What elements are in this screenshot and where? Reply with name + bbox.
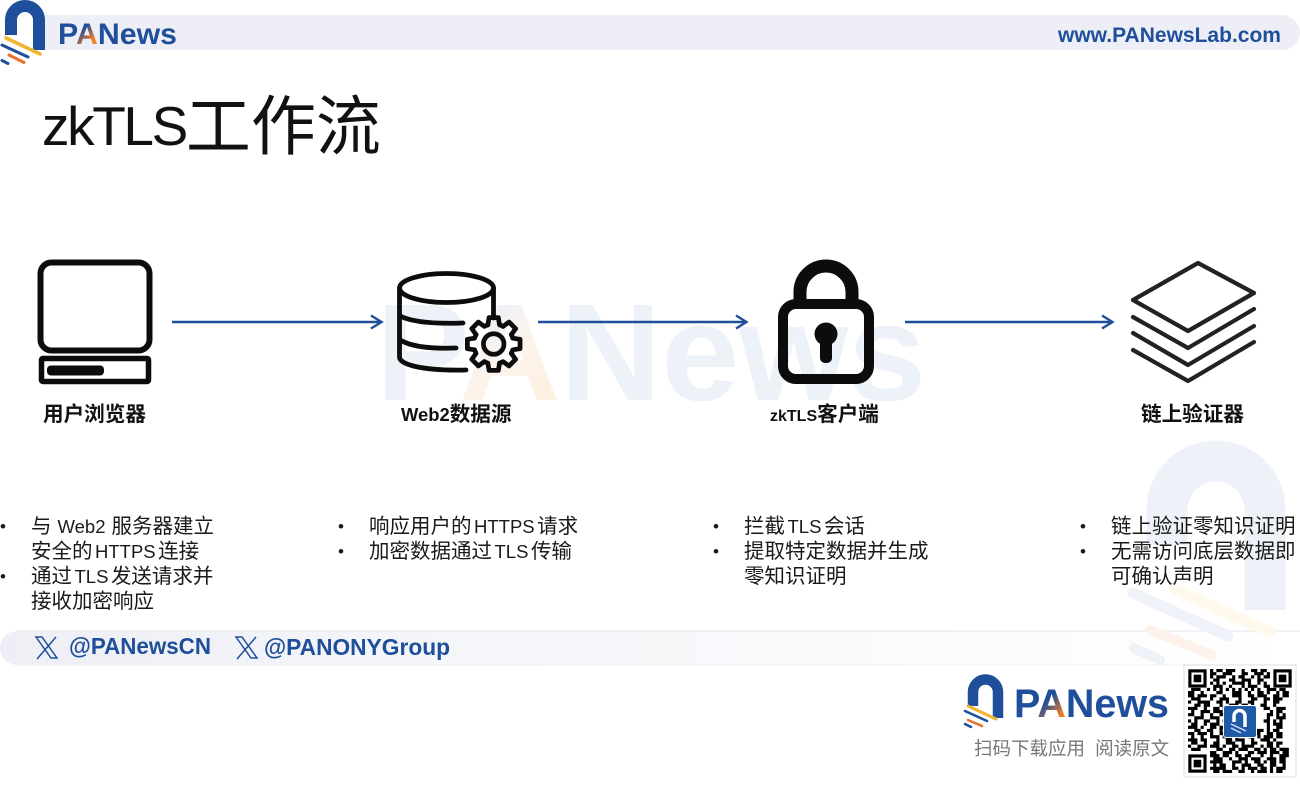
QR code xyxy=(1184,665,1296,777)
handle: PANewsCN: @PANewsCN xyxy=(69,633,211,659)
text block: source steps: 响应用户的HTTPS请求 xyxy=(369,515,578,538)
text block: browser steps xyxy=(0,515,214,613)
handle: PANONYGroup: @PANONYGroup xyxy=(264,634,450,660)
text block: verifier steps: 链上验证零知识证明 xyxy=(1111,515,1296,538)
icon: padlock xyxy=(783,266,869,379)
logo: footer emblem xyxy=(965,680,998,727)
title: zkTLS工作流 xyxy=(42,90,381,163)
icon: layers xyxy=(1133,263,1254,381)
arrow: data source to client xyxy=(538,316,746,328)
caption: scan to download: 扫码下载应用 阅读原文 xyxy=(974,738,1169,759)
footer bar xyxy=(0,631,1300,665)
watermark: corner logo xyxy=(1133,461,1270,660)
arrow: client to verifier xyxy=(905,316,1112,328)
icon: X right xyxy=(236,637,257,659)
label: zkTLS client: zkTLS客户端 xyxy=(770,403,879,426)
label: web2 source: Web2数据源 xyxy=(401,403,512,426)
text block: browser steps: 接收加密响应 xyxy=(31,590,154,613)
text block: browser steps: 通过TLS发送请求并 xyxy=(31,565,213,588)
text block: client steps: 拦截TLS会话 xyxy=(744,515,865,538)
logo: footer wordmark: PANews xyxy=(1014,682,1169,726)
header url: www.PANewsLab.com xyxy=(1057,24,1281,47)
text block: source steps xyxy=(338,515,578,563)
logo: header wordmark: PANews xyxy=(58,18,177,51)
text block: client steps xyxy=(714,515,928,588)
text block: browser steps: 与 Web2 服务器建立 xyxy=(31,515,214,538)
header bar xyxy=(40,15,1300,50)
icon: browser monitor xyxy=(40,262,150,382)
icon: database with gear xyxy=(400,274,520,370)
text block: source steps: 加密数据通过TLS传输 xyxy=(369,540,572,563)
text block: browser steps: 安全的HTTPS连接 xyxy=(31,540,199,563)
logo: header emblem xyxy=(2,6,40,64)
text block: client steps: 提取特定数据并生成 xyxy=(744,540,928,563)
icon: X left xyxy=(36,637,57,659)
arrow: browser to data source xyxy=(172,316,382,328)
text block: client steps: 零知识证明 xyxy=(744,565,846,588)
text block: verifier steps: 可确认声明 xyxy=(1111,565,1214,588)
label: on-chain verifier: 链上验证器 xyxy=(1141,403,1244,426)
watermark: PANews centre: PANews xyxy=(376,276,926,430)
text block: verifier steps: 无需访问底层数据即 xyxy=(1111,540,1296,563)
label: browser: 用户浏览器 xyxy=(43,403,146,426)
text block: verifier steps xyxy=(1080,515,1296,588)
